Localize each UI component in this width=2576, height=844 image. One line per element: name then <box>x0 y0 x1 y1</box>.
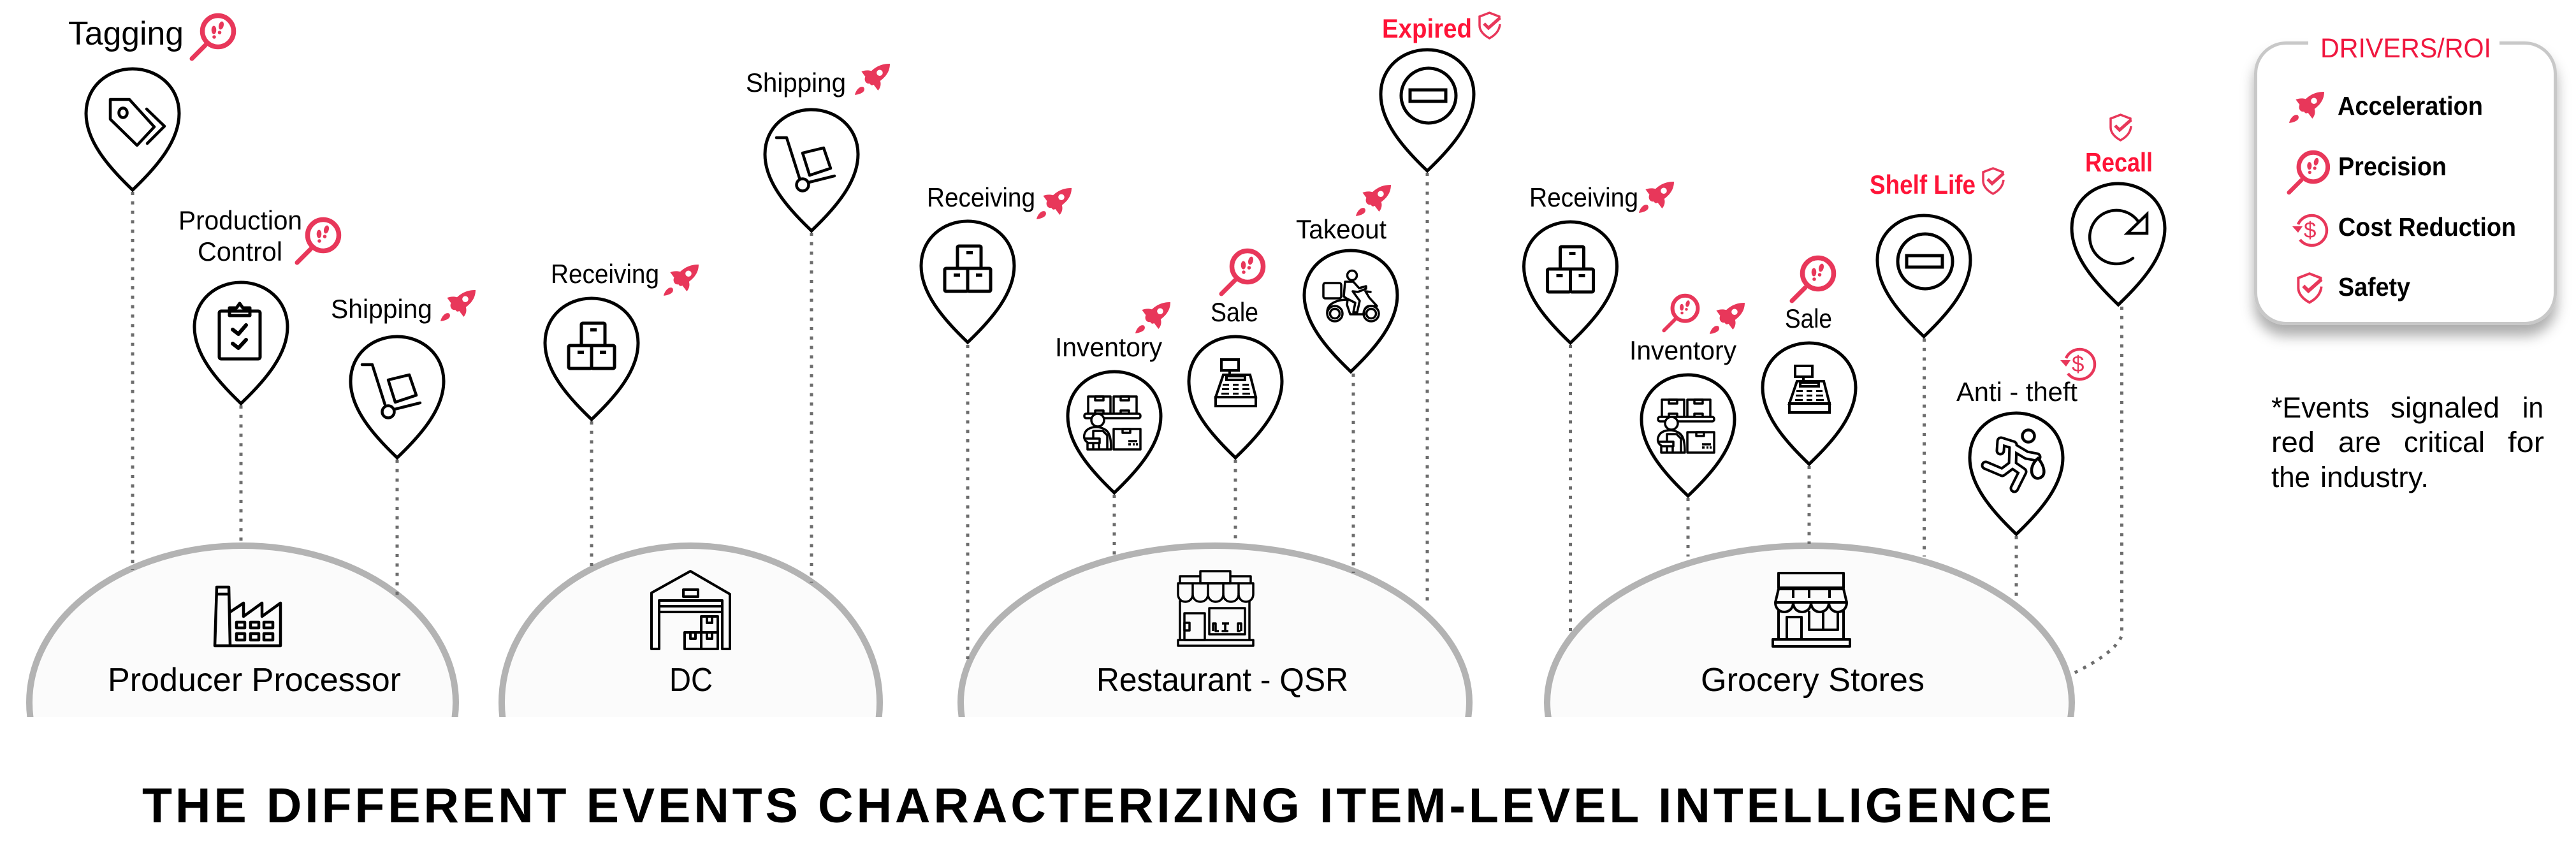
driver: precision <box>1792 258 1833 301</box>
hill: Grocery Stores <box>1544 542 2075 717</box>
event: Production Control <box>178 205 339 404</box>
pin marker <box>765 110 858 231</box>
legend text: cost reduction: Cost Reduction <box>2338 212 2516 242</box>
pin marker <box>1381 50 1474 171</box>
pin marker <box>1641 375 1735 496</box>
footnote: red events: for <box>2508 426 2544 458</box>
event: Receiving (grocery) <box>1524 182 1674 343</box>
event: Shelf Life <box>1870 168 2004 337</box>
legend icon: precision <box>2289 152 2328 193</box>
pin marker <box>1304 251 1397 372</box>
icon: boxes <box>569 323 615 368</box>
event: Shipping (producer): Shipping <box>331 294 432 324</box>
event: Receiving (DC): Receiving <box>551 259 659 289</box>
event: Receiving (restaurant): Receiving <box>927 182 1035 212</box>
pin marker <box>1970 413 2063 534</box>
driver: precision <box>1221 251 1263 294</box>
driver: cost reduction: $ <box>2072 352 2084 377</box>
icon: warehouse <box>651 571 730 649</box>
footnote: red events: are <box>2338 426 2381 458</box>
event: Sale (restaurant) <box>1189 251 1282 458</box>
title: THE DIFFERENT EVENTS CHARACTERIZING ITEM-LEVEL INTELLIGENCE <box>142 778 2052 833</box>
event: Recall: Recall <box>2085 147 2153 177</box>
pin marker <box>1189 337 1282 458</box>
footnote: red events: the <box>2271 461 2310 493</box>
icon: clipboard <box>219 303 260 359</box>
event: Inventory (restaurant) <box>1055 302 1170 493</box>
event: Expired <box>1381 13 1500 171</box>
icon: hand truck <box>362 365 420 418</box>
event: Sale (grocery) <box>1763 258 1856 464</box>
event: Receiving (restaurant) <box>921 182 1072 342</box>
driver: precision <box>297 219 339 263</box>
event: Shipping (DC) <box>746 64 890 231</box>
legend title: DRIVERS/ROI <box>2320 33 2491 64</box>
event: Tagging <box>68 15 233 190</box>
driver: acceleration <box>664 265 699 296</box>
icon: cash register <box>1789 366 1830 412</box>
event: Takeout <box>1296 185 1397 372</box>
event: Receiving (DC) <box>545 259 699 419</box>
event: Production Control: Production <box>178 205 302 235</box>
footnote: red events: in <box>2522 391 2543 424</box>
icon: inventory worker <box>1084 397 1140 449</box>
legend icon: cost reduction: $ <box>2304 218 2316 243</box>
hill label: DC <box>669 662 713 699</box>
driver: acceleration <box>855 64 890 95</box>
driver: precision <box>1664 296 1698 331</box>
icon: price tag <box>110 99 164 145</box>
pin marker <box>2072 184 2165 305</box>
hill: Producer Processor <box>26 542 459 717</box>
driver: acceleration <box>1037 188 1072 219</box>
pin marker <box>1068 372 1161 493</box>
driver: safety <box>1983 168 2004 194</box>
icon: cash register <box>1216 360 1256 406</box>
hill: Restaurant - QSR <box>957 542 1473 717</box>
event: Anti - theft: Anti - theft <box>1956 377 2078 407</box>
icon: boxes <box>1548 247 1594 292</box>
legend icon: acceleration <box>2289 92 2324 123</box>
pin marker <box>921 221 1014 342</box>
footnote: red events: signaled <box>2390 391 2500 424</box>
icon: delivery scooter <box>1323 270 1379 321</box>
event: Shipping (DC): Shipping <box>746 68 846 98</box>
icon: restaurant storefront <box>1178 571 1253 646</box>
driver: acceleration <box>1135 302 1170 333</box>
pin marker <box>86 69 179 190</box>
event: Anti - theft <box>1956 349 2095 534</box>
event: Inventory (grocery) <box>1629 296 1745 496</box>
dotted connectors from pins to hills <box>133 173 2121 675</box>
pin marker <box>351 337 444 458</box>
event: Sale (restaurant): Sale <box>1211 297 1258 327</box>
pin marker <box>545 298 638 419</box>
event: Expired: Expired <box>1382 13 1472 43</box>
event: Shipping (producer) <box>331 290 476 458</box>
driver: acceleration <box>1639 182 1674 213</box>
driver: safety <box>2111 115 2131 140</box>
footnote: red events: industry. <box>2320 461 2429 493</box>
icon: no entry <box>1401 68 1456 123</box>
footnote: red events: *Events <box>2271 391 2369 424</box>
driver: safety <box>1480 13 1500 38</box>
pin marker <box>1877 215 1970 337</box>
icon: no entry <box>1898 234 1953 289</box>
icon: recall arrow <box>2090 210 2147 264</box>
driver: cost reduction <box>2060 349 2095 379</box>
event: Sale (grocery): Sale <box>1785 303 1832 333</box>
footnote: red events: critical <box>2404 426 2485 458</box>
hill: DC <box>498 542 883 717</box>
icon: grocery storefront <box>1773 573 1850 646</box>
driver: precision <box>192 15 233 59</box>
driver: acceleration <box>1710 303 1745 334</box>
legend icon: safety <box>2298 273 2322 302</box>
driver: acceleration <box>1356 185 1391 216</box>
hill label: Producer Processor <box>108 662 401 699</box>
legend text: acceleration: Acceleration <box>2338 91 2483 120</box>
pin marker <box>194 282 287 404</box>
hill label: Restaurant - QSR <box>1096 662 1348 699</box>
icon: running thief <box>1986 430 2044 488</box>
event: Takeout: Takeout <box>1296 214 1386 244</box>
legend text: precision: Precision <box>2338 152 2447 181</box>
pin marker <box>1524 222 1617 343</box>
event: Receiving (grocery): Receiving <box>1529 182 1638 212</box>
legend icon: cost reduction <box>2292 215 2327 245</box>
icon: inventory worker <box>1658 400 1714 453</box>
legend panel: drivers / ROI <box>2255 33 2555 324</box>
footnote: red events <box>2271 391 2544 493</box>
event: Shelf Life: Shelf Life <box>1870 170 1976 200</box>
hill label: Grocery Stores <box>1701 662 1925 699</box>
event: Tagging: Tagging <box>68 15 184 52</box>
event: Production Control: Control <box>198 236 282 266</box>
icon: factory <box>215 587 280 646</box>
icon: hand truck <box>776 138 834 191</box>
event: Inventory (restaurant): Inventory <box>1055 332 1162 362</box>
icon: boxes <box>945 246 991 291</box>
event: Inventory (grocery): Inventory <box>1629 335 1736 365</box>
pin marker <box>1763 343 1856 464</box>
legend text: safety: Safety <box>2338 272 2410 302</box>
footnote: red events: red <box>2271 426 2315 458</box>
driver: acceleration <box>440 290 476 321</box>
event: Recall <box>2072 115 2165 305</box>
